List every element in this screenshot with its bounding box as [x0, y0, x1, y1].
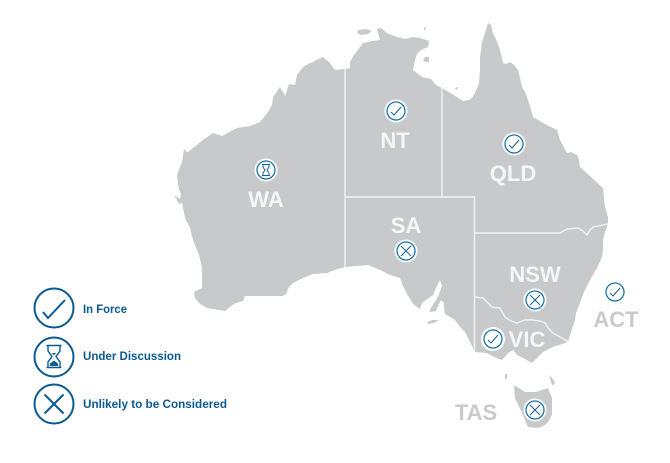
islands — [357, 27, 565, 386]
icon: SA unlikely — [394, 240, 418, 262]
state label: NSW: NSW — [509, 262, 561, 287]
icon: WA under discussion — [254, 158, 278, 182]
icon: VIC in force — [481, 327, 505, 351]
Tasmania landmass — [514, 385, 552, 428]
legend label: unlikely to be considered: Unlikely to be Considered — [83, 397, 227, 411]
legend icon: under discussion — [34, 338, 74, 376]
state label: NT: NT — [380, 128, 410, 153]
legend — [34, 288, 227, 424]
icon: ACT in force — [606, 283, 624, 301]
state borders — [345, 69, 608, 352]
map of Australia — [173, 23, 608, 428]
state label: TAS: TAS — [455, 400, 497, 425]
state label: ACT: ACT — [593, 307, 639, 332]
icon: TAS unlikely — [524, 398, 546, 422]
state label: SA: SA — [391, 213, 421, 238]
legend label: under discussion: Under Discussion — [83, 349, 181, 363]
legend label: in force: In Force — [83, 302, 127, 316]
icon: NT in force — [384, 100, 408, 122]
icon: QLD in force — [502, 132, 526, 156]
icon: NSW unlikely — [524, 288, 546, 312]
legend icon: in force — [34, 288, 74, 328]
mainland landmass — [173, 23, 608, 363]
legend icon: unlikely to be considered — [34, 384, 74, 424]
state label: QLD: QLD — [490, 161, 536, 186]
state label: WA: WA — [248, 187, 284, 212]
state label: VIC: VIC — [509, 327, 545, 352]
